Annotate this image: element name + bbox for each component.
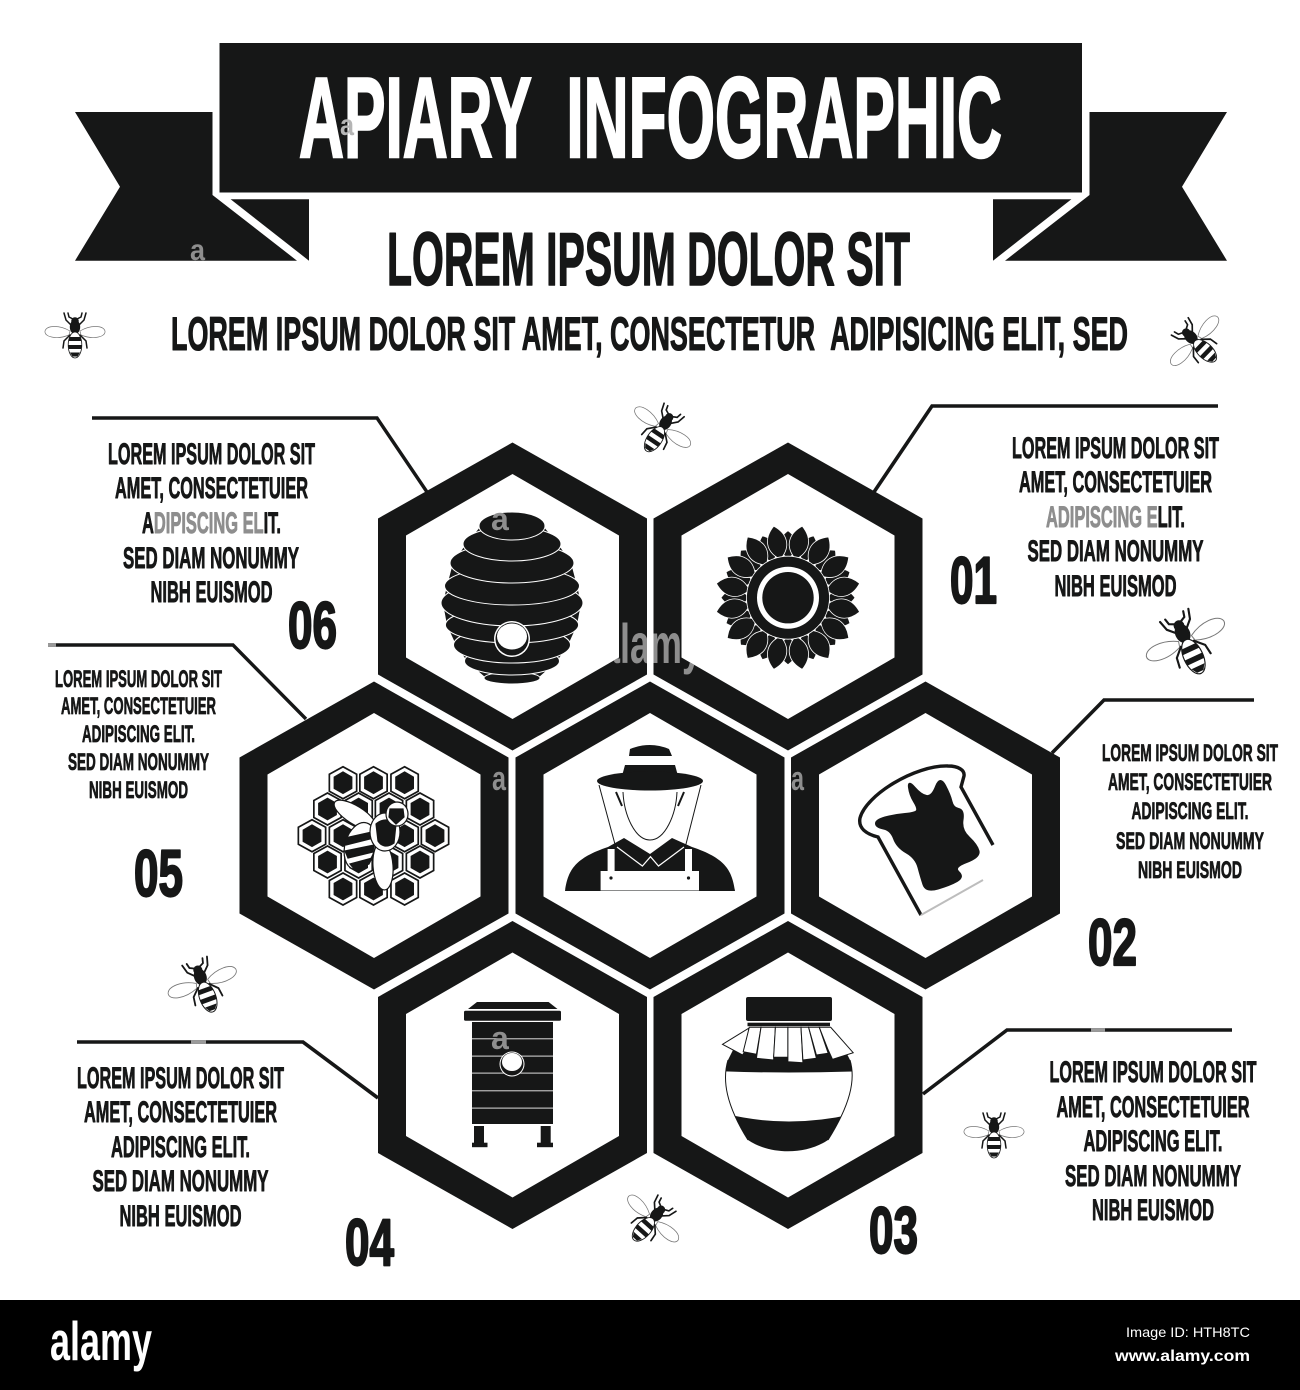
text block 06: SED DIAM NONUMMY	[123, 542, 299, 575]
text block 04: NIBH EUISMOD	[120, 1200, 242, 1233]
leader line 04	[77, 1042, 378, 1098]
icon: bee lower left	[161, 949, 247, 1024]
hat	[597, 745, 703, 790]
number 05: 05	[134, 836, 183, 910]
ribbon right fold	[993, 199, 1071, 261]
watermark letter on hive: a	[491, 501, 509, 537]
icon: large bee right	[1136, 597, 1240, 691]
text block 02	[1102, 740, 1278, 884]
icon: bee above hexagons	[619, 392, 702, 470]
icon: honeycomb	[298, 766, 450, 906]
text block 04: AMET, CONSECTETUIER	[84, 1096, 277, 1129]
apron	[601, 849, 699, 890]
ribbon right tail	[1005, 112, 1227, 261]
text block 05	[55, 666, 222, 804]
text block 05: NIBH EUISMOD	[89, 777, 188, 804]
leader line 03	[923, 1030, 1232, 1094]
icon: hive box	[464, 1002, 561, 1147]
text block 06: LOREM IPSUM DOLOR SIT	[108, 438, 315, 471]
ribbon left fold	[231, 199, 309, 261]
watermark letters on dark bands: a	[190, 234, 205, 267]
footer url: www.alamy.com	[1114, 1348, 1250, 1365]
footer bar	[0, 1300, 1300, 1390]
icon: bee top right	[1157, 303, 1238, 385]
text block 04	[77, 1062, 284, 1233]
text block 05: ADIPISCING ELIT.	[82, 721, 195, 748]
text block 05: AMET, CONSECTETUIER	[61, 693, 216, 720]
collar	[617, 847, 684, 866]
hexagon 02: toast with jam	[791, 682, 1060, 990]
text block 06: NIBH EUISMOD	[150, 576, 272, 609]
watermark letters on dark bands: a	[340, 109, 354, 142]
hexagon 05: honeycomb with bee	[240, 682, 508, 990]
icon: bee lower right	[964, 1113, 1024, 1158]
veil and face outline	[599, 785, 701, 848]
text block 04: LOREM IPSUM DOLOR SIT	[77, 1062, 284, 1095]
torso	[565, 838, 735, 891]
hexagon 06: skep beehive	[378, 442, 647, 750]
title ribbon	[75, 43, 1227, 261]
hexagon 03: honey jar	[654, 921, 922, 1229]
text block 06	[108, 438, 315, 609]
number 04: 04	[345, 1205, 394, 1279]
watermark letter on hive box: a	[491, 1020, 509, 1056]
hexagon center: beekeeper	[516, 682, 784, 990]
footer logo: alamy	[50, 1310, 152, 1372]
hexagon 01: sunflower	[654, 442, 922, 750]
watermark letters on dark bands: a	[791, 760, 805, 798]
icon: bee on honeycomb	[330, 795, 408, 891]
icon: bee top left	[45, 313, 105, 358]
icon: straw skep hive	[441, 512, 583, 684]
text block 03	[1050, 1056, 1256, 1227]
text block 04: ADIPISCING ELIT.	[111, 1131, 250, 1164]
watermark letters on dark bands: a	[492, 760, 507, 798]
ribbon left tail	[75, 112, 297, 261]
watermark letters on dark bands	[48, 109, 1105, 1044]
text block 01: ADIPISCING ELIT.	[1046, 501, 1185, 534]
number 02: 02	[1088, 905, 1137, 979]
icon: beekeeper	[565, 745, 735, 891]
leader line 01	[874, 406, 1218, 492]
icon: toast with jam	[860, 766, 993, 915]
watermark over hexagons: alamy	[600, 612, 702, 675]
text block 04: SED DIAM NONUMMY	[92, 1165, 269, 1198]
number 01: 01	[950, 543, 997, 617]
leader line 02	[1052, 700, 1254, 753]
ribbon main band	[220, 43, 1082, 192]
text block 05: LOREM IPSUM DOLOR SIT	[55, 666, 222, 693]
leader line 05	[48, 645, 306, 719]
icon: honey jar	[722, 997, 854, 1152]
text block 05: SED DIAM NONUMMY	[68, 749, 209, 776]
number 03: 03	[869, 1193, 918, 1267]
icon: bee bottom centre	[609, 1181, 691, 1262]
leader line 06	[92, 418, 427, 492]
icon: sunflower	[715, 524, 861, 671]
text block 06: AMET, CONSECTETUIER	[115, 472, 308, 505]
text block 06: ADIPISCING ELIT.	[142, 507, 281, 540]
footer image id: Image ID: HTH8TC	[1126, 1324, 1250, 1340]
hexagon 04: wooden hive box	[378, 921, 647, 1229]
text block 01: NIBH EUISMOD	[1054, 570, 1176, 603]
number 06: 06	[288, 588, 337, 662]
text block 01	[1012, 432, 1219, 603]
